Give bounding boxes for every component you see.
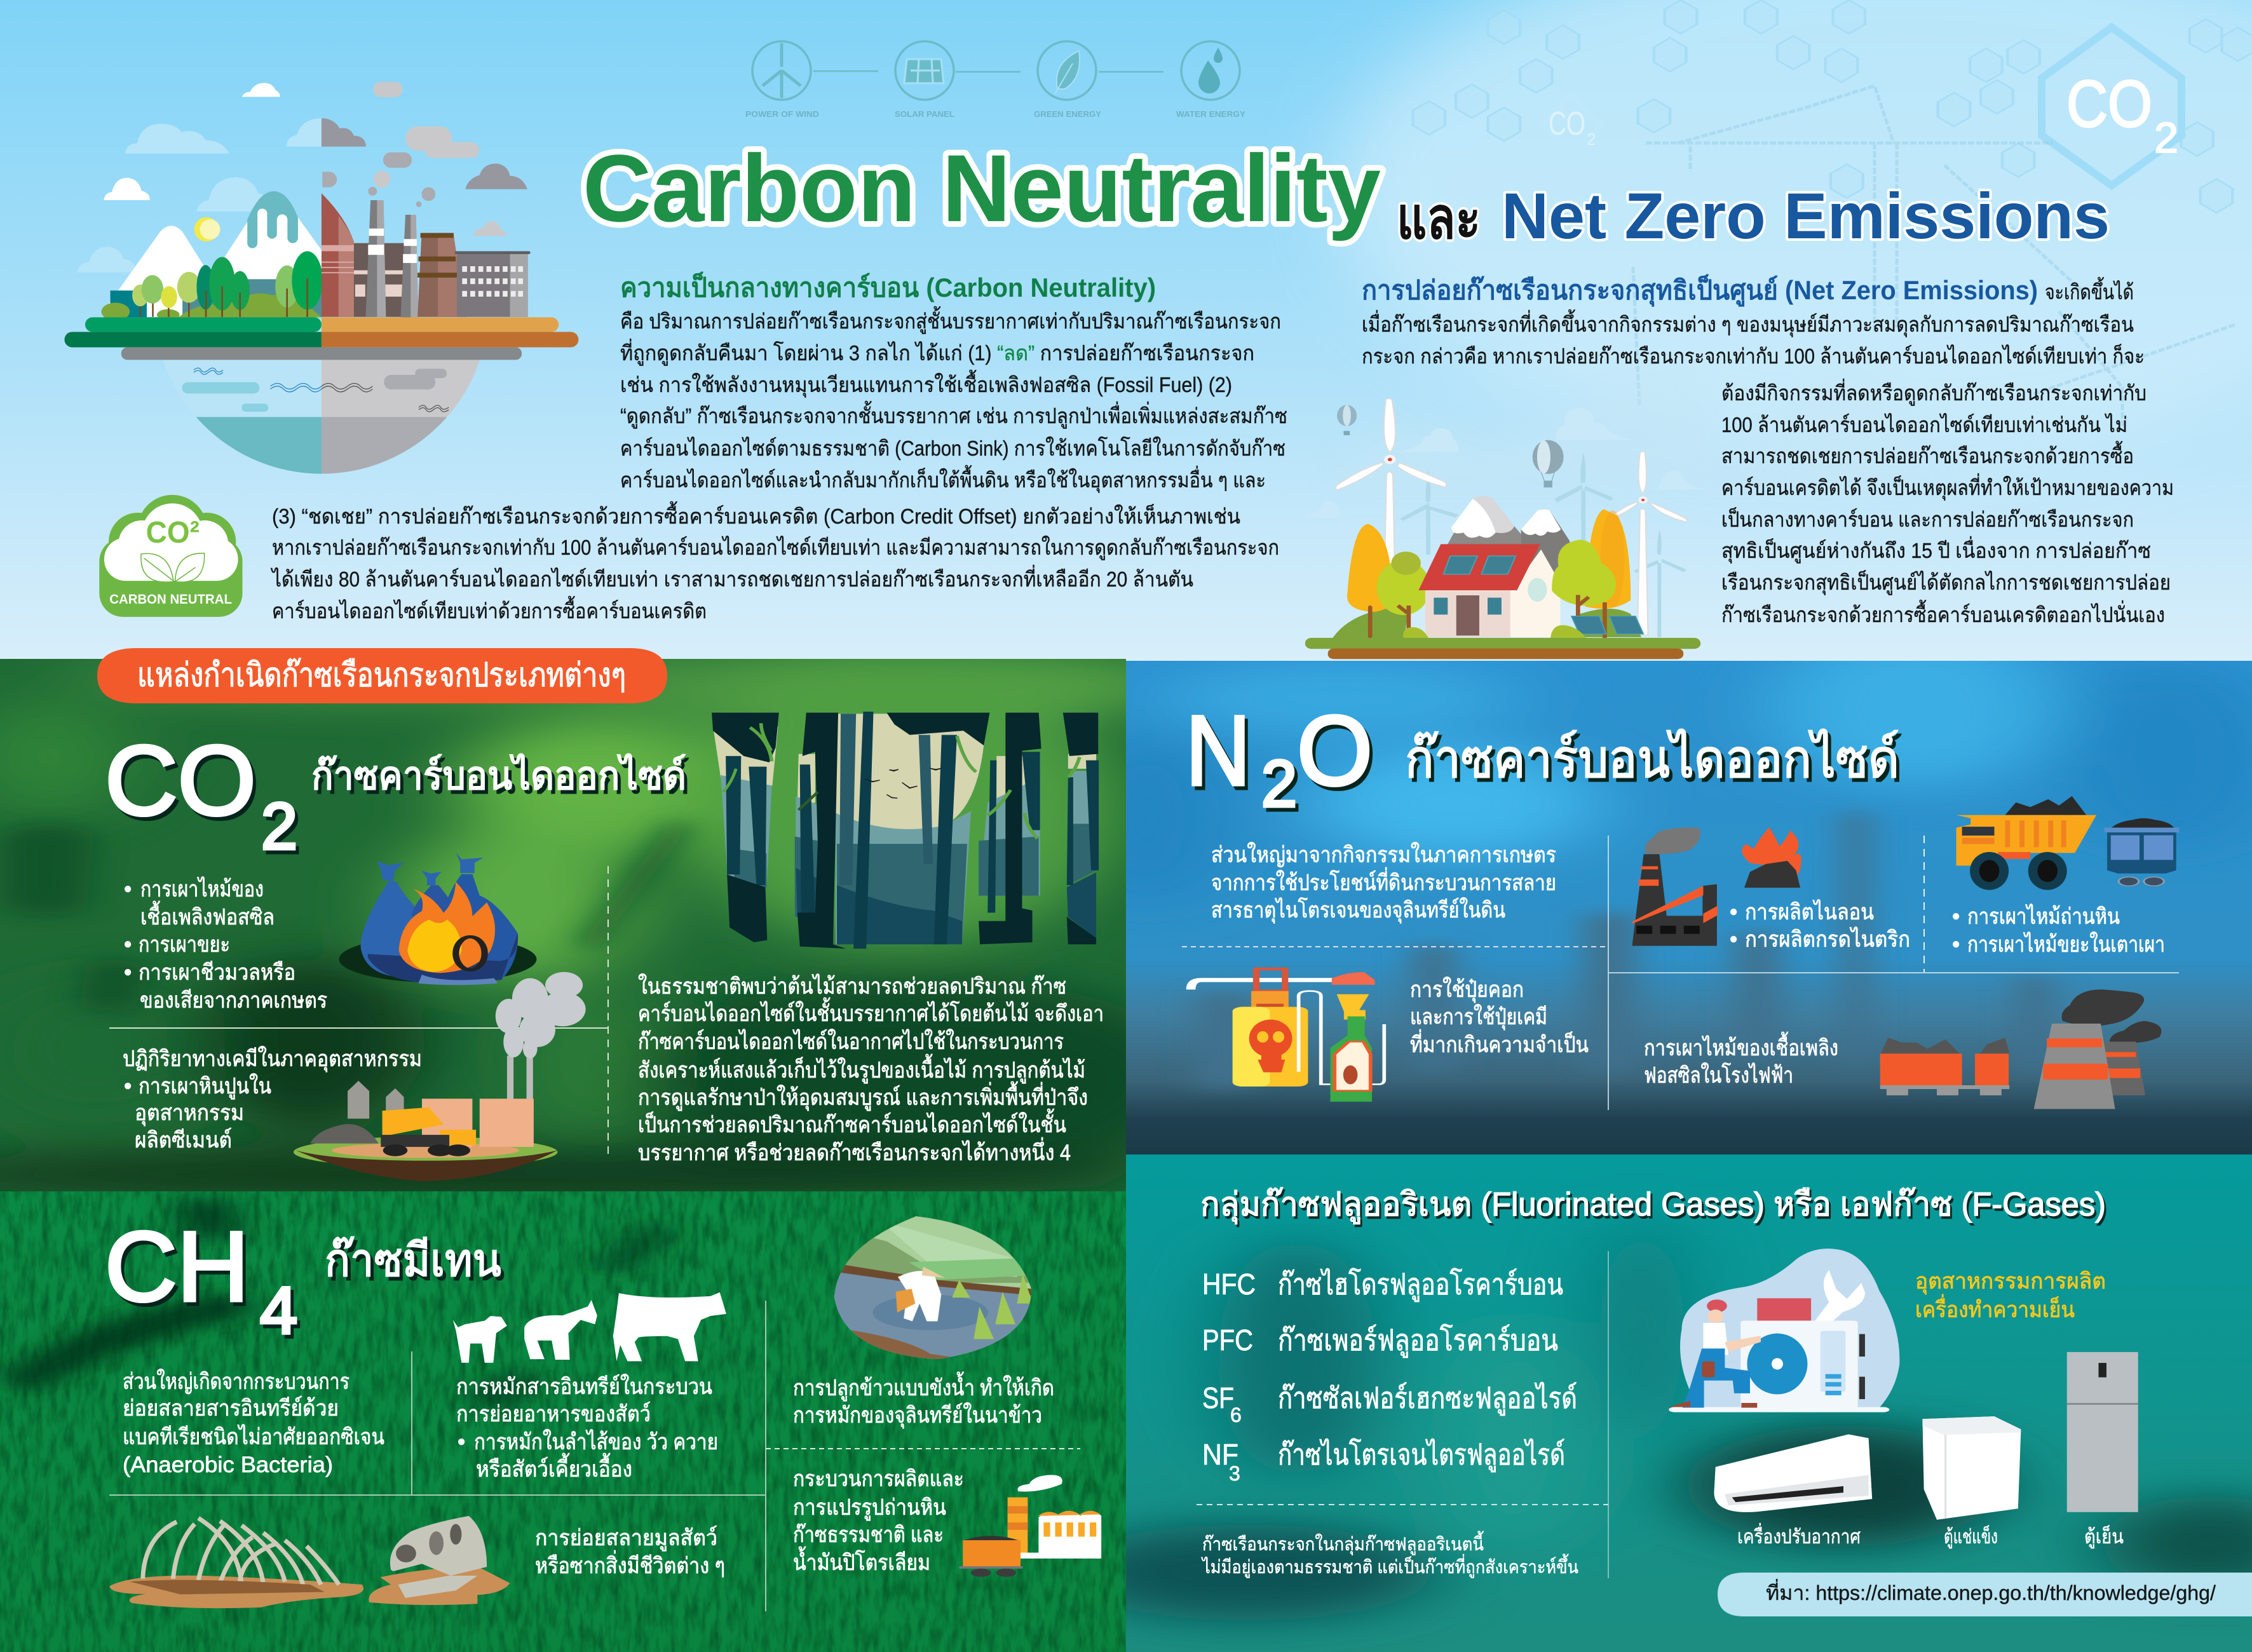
text: methane fossil production: การแปรรูปถ่านหิน — [793, 1495, 946, 1520]
background label: CO2 hexagon: 2 — [1587, 130, 1596, 149]
caption: appliance names: เครื่องปรับอากาศ — [1737, 1523, 1861, 1548]
text: synthetic gas note: ไม่มีอยู่เองตามธรรมชาติ แต่เป็นก๊าซที่ถูกสังเคราะห์ขึ้น — [1201, 1554, 1578, 1578]
list: fluorinated gas types: PFC — [1202, 1324, 1253, 1357]
text: burning coal and waste: การเผาไหม้ขยะในเตาเผา — [1967, 931, 2165, 957]
energy icon captions: GREEN ENERGY — [1034, 110, 1102, 119]
text block: carbon neutrality definition: (3) “ชดเชย” การปล่อยก๊าซเรือนกระจกด้วยการซื้อคาร์บอนเครดิต (Carbon Credit Offset) ยกตัวอย่างให้เห็นภาพเช่น — [272, 501, 1240, 528]
text: burning coal and waste: • — [1952, 904, 1960, 929]
text: synthetic gas note: ก๊าซเรือนกระจกในกลุ่มก๊าซฟลูออริเนตนี้ — [1202, 1531, 1484, 1555]
icons: renewable energy row — [752, 41, 1240, 100]
text: CO2 combustion sources: • — [124, 877, 132, 902]
text: refrigeration industry: อุตสาหกรรมการผลิต — [1915, 1269, 2106, 1294]
text: CO2 industrial reactions: การเผาหินปูนใน — [139, 1073, 271, 1099]
list: fluorinated gas types: ก๊าซซัลเฟอร์เฮกซะฟลูออไรด์ — [1278, 1381, 1577, 1416]
icon: donkey — [524, 1300, 597, 1360]
text: methane enteric fermentation — [456, 1374, 718, 1482]
illustration: refrigerator — [2067, 1352, 2138, 1512]
energy icon captions: WATER ENERGY — [1176, 110, 1246, 119]
text: trees absorb carbon: ก๊าซคาร์บอนไดออกไซด์ในอากาศไปใช้ในกระบวนการ — [638, 1029, 1064, 1054]
list: fluorinated gas types: ก๊าซไฮโดรฟลูออโรคาร์บอน — [1278, 1268, 1563, 1302]
text: CO2 industrial reactions: ผลิตซีเมนต์ — [135, 1128, 232, 1153]
text: methane rice paddies: การหมักของจุลินทรีย์ในนาข้าว — [793, 1402, 1042, 1428]
background label: CO2 hexagon: 2 — [2154, 114, 2178, 162]
text block: net zero emissions definition: เมื่อก๊าซเรือนกระจกที่เกิดขึ้นจากกิจกรรมต่าง ๆ ของมนุษย์มีภาวะสมดุลกับการลดปริมาณก๊าซเรือน — [1362, 309, 2134, 337]
background label: CO2 hexagon — [1549, 67, 2178, 162]
heading: CH4 formula and name — [105, 1212, 501, 1348]
text: nylon and nitric acid: • — [1730, 927, 1737, 952]
icon: green energy leaf — [1038, 41, 1096, 100]
text block: net zero emissions definition: ก๊าซเรือนกระจกด้วยการซื้อคาร์บอนเครดิตออกไปนั่นเอง — [1721, 600, 2165, 626]
illustration: pesticide sprayer and bottle — [1191, 969, 1384, 1102]
text: nylon and nitric acid — [1730, 899, 1910, 952]
text block: net zero emissions definition: คาร์บอนเครดิตได้ จึงเป็นเหตุผลที่ทำให้เป้าหมายของความ — [1721, 473, 2174, 501]
text: CO2 combustion sources: • — [124, 932, 132, 957]
source citation pill: ที่มา: https://climate.onep.go.th/th/knowledge/ghg/ — [1766, 1579, 2216, 1604]
text block: carbon neutrality definition: คาร์บอนไดออกไซด์และนำกลับมากักเก็บใต้พื้นดิน หรือใช้ในอุตสาหกรรมอื่น ๆ และ — [620, 465, 1266, 493]
text: trees absorb carbon: สังเคราะห์แสงแล้วเก็บไว้ในรูปของเนื้อไม้ การปลูกต้นไม้ — [638, 1053, 1085, 1083]
heading: N2O formula and name: O — [1297, 696, 1373, 806]
heading: N2O formula and name: ก๊าซคาร์บอนไดออกไซด์ — [1405, 729, 1899, 789]
text block: carbon neutrality definition: คือ ปริมาณการปล่อยก๊าซเรือนกระจกสู่ชั้นบรรยากาศเท่ากับปริมาณก๊าซเรือนกระจก — [620, 306, 1281, 334]
illustration: rice farmer oval — [829, 1215, 1038, 1369]
text block: carbon neutrality definition: ได้เพียง 80 ล้านตันคาร์บอนไดออกไซด์เทียบเท่า เราสามารถชดเชยการปล่อยก๊าซเรือนกระจกที่เหลืออีก 20 ล้านตัน — [270, 565, 1193, 591]
icon: water drop — [1181, 41, 1240, 100]
text: methane anaerobic bacteria: (Anaerobic Bacteria) — [123, 1452, 333, 1477]
illustration: power plant cooling towers — [2034, 989, 2161, 1109]
text: CO2 combustion sources: การเผาขยะ — [139, 932, 230, 957]
text: methane fossil production — [793, 1466, 964, 1575]
text: methane anaerobic bacteria — [123, 1369, 384, 1477]
icon: wind power — [752, 41, 811, 100]
text: CO2 industrial reactions — [123, 1046, 422, 1153]
text: nylon and nitric acid: • — [1730, 900, 1737, 924]
text: methane anaerobic bacteria: ส่วนใหญ่เกิดจากกระบวนการ — [123, 1369, 349, 1394]
text: burning coal and waste — [1952, 904, 2165, 957]
text: nylon and nitric acid: การผลิตกรดไนตริก — [1745, 926, 1910, 952]
icon: goat — [453, 1316, 507, 1363]
illustration: burning garbage bags — [339, 853, 536, 985]
text: CO2 combustion sources — [124, 876, 327, 1013]
badge: carbon neutral cloud: CO² — [146, 515, 200, 550]
illustration: wall air conditioner — [1714, 1434, 1872, 1512]
text: methane enteric fermentation: • — [458, 1430, 465, 1454]
badge: carbon neutral cloud: CARBON NEUTRAL — [109, 591, 232, 607]
heading: fluorinated gases: กลุ่มก๊าซฟลูออริเนต (Fluorinated Gases) หรือ เอฟก๊าซ (F-Gases) — [1200, 1186, 2106, 1224]
text: nitrous oxide agriculture: จากการใช้ประโยชน์ที่ดินกระบวนการสลาย — [1211, 867, 1556, 895]
text block: carbon neutrality definition: “ดูดกลับ” ก๊าซเรือนกระจกจากชั้นบรรยากาศ เช่น การปลูกป่าเพื่อเพิ่มแหล่งสะสมก๊าซ — [620, 401, 1287, 429]
text: fertilizer use — [1410, 977, 1589, 1057]
text block: net zero emissions definition — [1362, 274, 2174, 626]
title: และ — [1397, 186, 1481, 251]
text: methane anaerobic bacteria: แบคทีเรียชนิดไม่อาศัยออกซิเจน — [123, 1424, 384, 1449]
text: nylon and nitric acid: การผลิตไนลอน — [1745, 899, 1874, 924]
heading: CH4 formula and name: 4 — [260, 1274, 297, 1348]
text: fossil fuels in power plants — [1644, 1031, 1838, 1088]
text: CO2 combustion sources: การเผาไหม้ของ — [140, 876, 264, 902]
text: fossil fuels in power plants: ฟอสซิลในโรงไฟฟ้า — [1644, 1062, 1793, 1088]
heading: N2O formula and name: 2 — [1261, 747, 1297, 821]
text: methane decomposition: การย่อยสลายมูลสัตว์ — [535, 1526, 717, 1551]
text: CO2 industrial reactions: • — [124, 1074, 132, 1099]
text: CO2 industrial reactions: ปฏิกิริยาทางเคมีในภาคอุตสาหกรรม — [123, 1046, 422, 1072]
text block: carbon neutrality definition — [270, 271, 1287, 623]
text block: net zero emissions definition: เรือนกระจกสุทธิเป็นศูนย์ได้ตัดกลไกการชดเชยการปล่อย — [1721, 570, 2171, 595]
text block: net zero emissions definition: สุทธิเป็นศูนย์ห่างกันถึง 15 ปี เนื่องจาก การปล่อยก๊าซ — [1721, 536, 2151, 564]
text: CO2 combustion sources: ของเสียจากภาคเกษตร — [140, 988, 327, 1013]
text: methane fossil production: ก๊าซธรรมชาติ และ — [793, 1522, 944, 1547]
energy icon captions: SOLAR PANEL — [895, 110, 954, 119]
list: fluorinated gas types: 6 — [1230, 1404, 1242, 1426]
heading: CO2 formula and name: CO — [105, 726, 256, 836]
illustration: animal rib bones — [110, 1518, 363, 1608]
list: fluorinated gas types: NF — [1202, 1438, 1238, 1471]
heading: N2O formula and name: N — [1186, 696, 1251, 806]
text: fertilizer use: การใช้ปุ๋ยคอก — [1410, 977, 1524, 1003]
text: trees absorb carbon: เป็นการช่วยลดปริมาณก๊าซคาร์บอนไดออกไซด์ในชั้น — [638, 1108, 1066, 1137]
energy icon captions: POWER OF WIND — [745, 110, 819, 119]
text: burning coal and waste: • — [1952, 932, 1960, 957]
heading: net zero emissions: การปล่อยก๊าซเรือนกระจกสุทธิเป็นศูนย์ (Net Zero Emissions) — [1362, 274, 2038, 307]
heading: CO2 formula and name: 2 — [261, 790, 297, 863]
caption: appliance names — [1737, 1523, 2124, 1548]
text: CO2 combustion sources: เชื้อเพลิงฟอสซิล — [140, 900, 275, 930]
list: fluorinated gas types: HFC — [1202, 1268, 1256, 1301]
list: fluorinated gas types — [1202, 1268, 1577, 1485]
text: CO2 industrial reactions: อุตสาหกรรม — [135, 1100, 244, 1126]
text block: carbon neutrality definition: หากเราปล่อยก๊าซเรือนกระจกเท่ากับ 100 ล้านตันคาร์บอนไดออกไซด์เทียบเท่า และมีความสามารถในการดูดกลับก๊าซเรือนกระจก — [272, 536, 1279, 560]
text block: net zero emissions definition: เป็นกลางทางคาร์บอน และการปล่อยก๊าซเรือนกระจก — [1721, 507, 2134, 531]
illustration: technician repairing air conditioner — [1669, 1249, 1899, 1412]
title — [583, 135, 2110, 252]
title: Carbon Neutrality — [583, 135, 1381, 241]
text: methane decomposition: หรือซากสิ่งมีชีวิตต่าง ๆ — [535, 1550, 725, 1578]
text: synthetic gas note — [1201, 1531, 1578, 1578]
text block: net zero emissions definition: จะเกิดขึ้นได้ — [2045, 277, 2134, 304]
illustration: fossil skull — [369, 1516, 510, 1605]
panel: N2O nitrous oxide sources — [1060, 629, 2252, 1154]
caption: appliance names: ตู้แช่แข็ง — [1944, 1525, 1998, 1548]
section label pill: แหล่งกำเนิดก๊าซเรือนกระจกประเภทต่างๆ — [137, 657, 626, 694]
panel: CH4 methane sources — [0, 1191, 1126, 1652]
text: trees absorb carbon: คาร์บอนไดออกไซด์ในชั้นบรรยากาศได้โดยต้นไม้ จะดึงเอา — [638, 997, 1104, 1026]
section label pill — [97, 648, 667, 703]
illustration: mining dump truck — [1957, 796, 2096, 890]
icon: cow — [613, 1292, 726, 1361]
illustration: cement factory and mixer truck — [294, 972, 586, 1181]
illustration: house with wind turbines — [1301, 398, 1707, 659]
energy icon captions — [745, 110, 1246, 119]
illustration: coal train wagons — [1880, 1038, 2009, 1095]
heading: carbon neutrality: ความเป็นกลางทางคาร์บอน (Carbon Neutrality) — [620, 271, 1156, 302]
caption: appliance names: ตู้เย็น — [2084, 1525, 2124, 1548]
text: trees absorb carbon: บรรยากาศ หรือช่วยลดก๊าซเรือนกระจกได้ทางหนึ่ง 4 — [638, 1137, 1071, 1165]
list: fluorinated gas types: ก๊าซเพอร์ฟลูออโรคาร์บอน — [1278, 1324, 1558, 1358]
illustration: smoking factory — [1632, 827, 1718, 946]
illustration: coal wagon and factory — [960, 1475, 1101, 1577]
source citation pill — [1718, 1573, 2252, 1616]
text: fertilizer use: และการใช้ปุ๋ยเคมี — [1410, 1004, 1547, 1030]
illustration: goat donkey cow silhouettes — [453, 1292, 726, 1363]
text: methane rice paddies: การปลูกข้าวแบบขังน้ำ ทำให้เกิด — [793, 1371, 1054, 1401]
heading: CO2 formula and name: ก๊าซคาร์บอนไดออกไซด์ — [311, 754, 686, 798]
text: burning coal and waste: การเผาไหม้ถ่านหิน — [1967, 904, 2120, 929]
text block: carbon neutrality definition: คาร์บอนไดออกไซด์เทียบเท่าด้วยการซื้อคาร์บอนเครดิต — [272, 596, 707, 623]
background label: CO2 hexagon: CO — [2066, 67, 2152, 141]
text: methane fossil production: น้ำมันปิโตรเลียม — [793, 1546, 930, 1575]
text block: net zero emissions definition: 100 ล้านตันคาร์บอนไดออกไซด์เทียบเท่าเช่นกัน ไม่ — [1721, 413, 2127, 437]
text block: net zero emissions definition: กระจก กล่าวคือ หากเราปล่อยก๊าซเรือนกระจกเท่ากับ 100 ล้านตันคาร์บอนไดออกไซด์เทียบเท่า ก็จะ — [1362, 344, 2145, 368]
text: methane decomposition — [535, 1526, 725, 1578]
list: fluorinated gas types: SF — [1202, 1381, 1234, 1414]
text block: carbon neutrality definition: เช่น การใช้พลังงานหมุนเวียนแทนการใช้เชื้อเพลิงฟอสซิล (Fossil Fuel) (2) — [620, 370, 1232, 398]
heading: CH4 formula and name: CH — [105, 1212, 249, 1322]
text: methane rice paddies — [793, 1371, 1054, 1428]
text block: carbon neutrality definition: ที่ถูกดูดกลับคืนมา โดยผ่าน 3 กลไก ได้แก่ (1) “ลด” การปล่อยก๊าซเรือนกระจก — [620, 339, 1254, 366]
text: methane enteric fermentation: การหมักในลำไส้ของ วัว ควาย — [474, 1429, 718, 1454]
background label: CO2 hexagon: CO — [1549, 105, 1585, 142]
text: methane fossil production: กระบวนการผลิตและ — [793, 1466, 964, 1491]
text: fertilizer use: ที่มากเกินความจำเป็น — [1410, 1029, 1589, 1057]
title: Net Zero Emissions — [1502, 180, 2110, 252]
text: nitrous oxide agriculture: ส่วนใหญ่มาจากกิจกรรมในภาคการเกษตร — [1211, 842, 1556, 867]
illustration: coal wagon — [2105, 818, 2179, 886]
text block: net zero emissions definition: ต้องมีกิจกรรมที่ลดหรือดูดกลับก๊าซเรือนกระจกเท่ากับ — [1721, 379, 2147, 406]
text: refrigeration industry: เครื่องทำความเย็น — [1915, 1294, 2075, 1322]
text: refrigeration industry — [1915, 1269, 2106, 1322]
heading: CO2 formula and name — [105, 726, 686, 863]
heading: N2O formula and name — [1186, 696, 1899, 821]
text: trees absorb carbon: ในธรรมชาติพบว่าต้นไม้สามารถช่วยลดปริมาณ ก๊าซ — [638, 973, 1066, 999]
list: fluorinated gas types: ก๊าซไนโตรเจนไตรฟลูออไรด์ — [1278, 1438, 1565, 1472]
text block: net zero emissions definition: สามารถชดเชยการปล่อยก๊าซเรือนกระจกด้วยการซื้อ — [1721, 441, 2134, 468]
illustration: burning coal — [1742, 827, 1801, 888]
panel: intro sky background — [0, 0, 2252, 661]
icon: solar panel — [895, 41, 954, 100]
panel: fluorinated gases — [1060, 1154, 2252, 1652]
panel: CO2 carbon dioxide sources — [0, 659, 1126, 1191]
text: trees absorb carbon: การดูแลรักษาป่าให้อุดมสมบูรณ์ และการเพิ่มพื้นที่ป่าจึง — [638, 1081, 1088, 1111]
text: fossil fuels in power plants: การเผาไหม้ของเชื้อเพลิง — [1644, 1031, 1838, 1060]
text: methane anaerobic bacteria: ย่อยสลายสารอินทรีย์ด้วย — [123, 1396, 339, 1421]
text: methane enteric fermentation: หรือสัตว์เคี้ยวเอื้อง — [476, 1452, 632, 1482]
heading: CH4 formula and name: ก๊าซมีเทน — [325, 1235, 501, 1286]
illustration: forest silhouette — [712, 712, 1099, 949]
text: CO2 combustion sources: การเผาชีวมวลหรือ — [139, 960, 295, 985]
text: nitrous oxide agriculture — [1211, 842, 1556, 923]
text: methane enteric fermentation: การหมักสารอินทรีย์ในกระบวน — [456, 1374, 712, 1399]
badge: carbon neutral cloud — [99, 495, 243, 617]
text: CO2 combustion sources: • — [124, 960, 132, 985]
text block: carbon neutrality definition: คาร์บอนไดออกไซด์ตามธรรมชาติ (Carbon Sink) การใช้เทคโนโลยีในการดักจับก๊าซ — [620, 437, 1285, 460]
text: methane enteric fermentation: การย่อยอาหารของสัตว์ — [456, 1402, 651, 1426]
illustration: chest freezer — [1922, 1416, 2021, 1520]
text: trees absorb carbon — [638, 973, 1104, 1165]
list: fluorinated gas types: 3 — [1229, 1462, 1240, 1485]
illustration: half-green half-industrial globe — [64, 82, 578, 482]
text: nitrous oxide agriculture: สารธาตุไนโตรเจนของจุลินทรีย์ในดิน — [1211, 897, 1505, 923]
